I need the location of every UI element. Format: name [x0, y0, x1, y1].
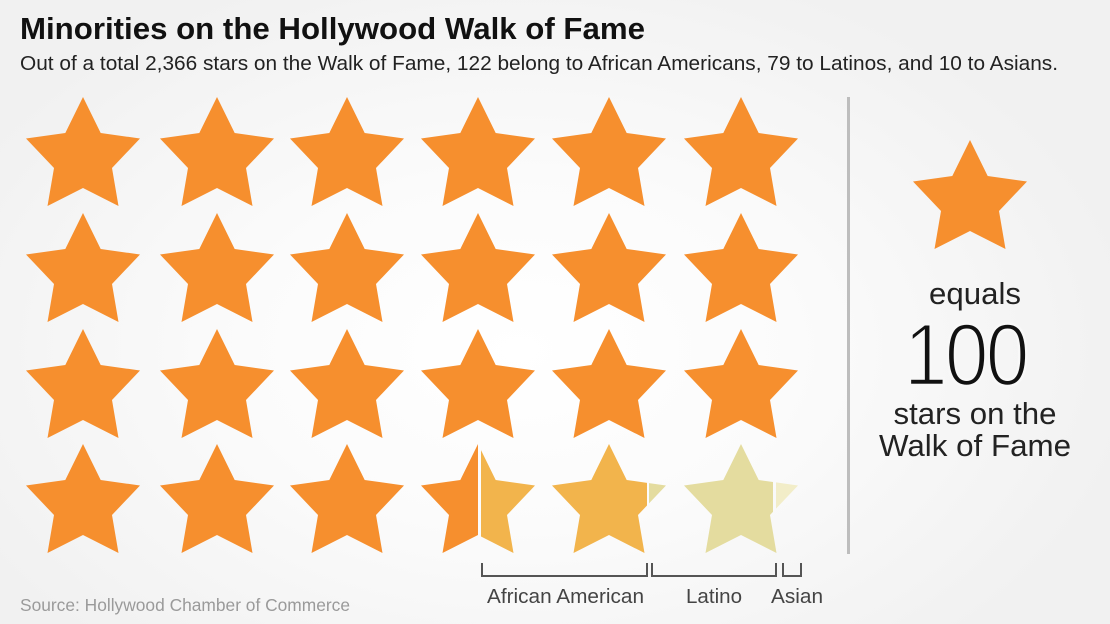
- legend: equals: equals: [929, 276, 1021, 311]
- label: Asian: Asian: [771, 585, 823, 608]
- legend: Walk of Fame: Walk of Fame: [879, 428, 1071, 463]
- bracket: Asian: [783, 563, 801, 576]
- divider: [847, 97, 850, 554]
- bracket: Latino: [652, 563, 776, 576]
- star row 2: [26, 213, 798, 322]
- bracket: African American: [482, 563, 647, 576]
- label: African American: African American: [487, 585, 644, 608]
- legend: stars on the: stars on the: [894, 396, 1056, 431]
- star row 1: [26, 97, 798, 206]
- source: Source: Hollywood Chamber of Commerce: [20, 595, 350, 615]
- star row 4: [26, 444, 798, 553]
- subtitle: Out of a total 2,366 stars on the Walk of Fame, 122 belong to African Americans, 79 to Latinos, and 10 to Asians.: [20, 53, 1058, 75]
- label: Latino: Latino: [686, 585, 742, 608]
- star row 3: [26, 329, 798, 438]
- title: Minorities on the Hollywood Walk of Fame: [20, 12, 645, 46]
- legend star: [913, 140, 1027, 249]
- star grid: [26, 97, 798, 553]
- legend: 100: 100: [904, 306, 1027, 404]
